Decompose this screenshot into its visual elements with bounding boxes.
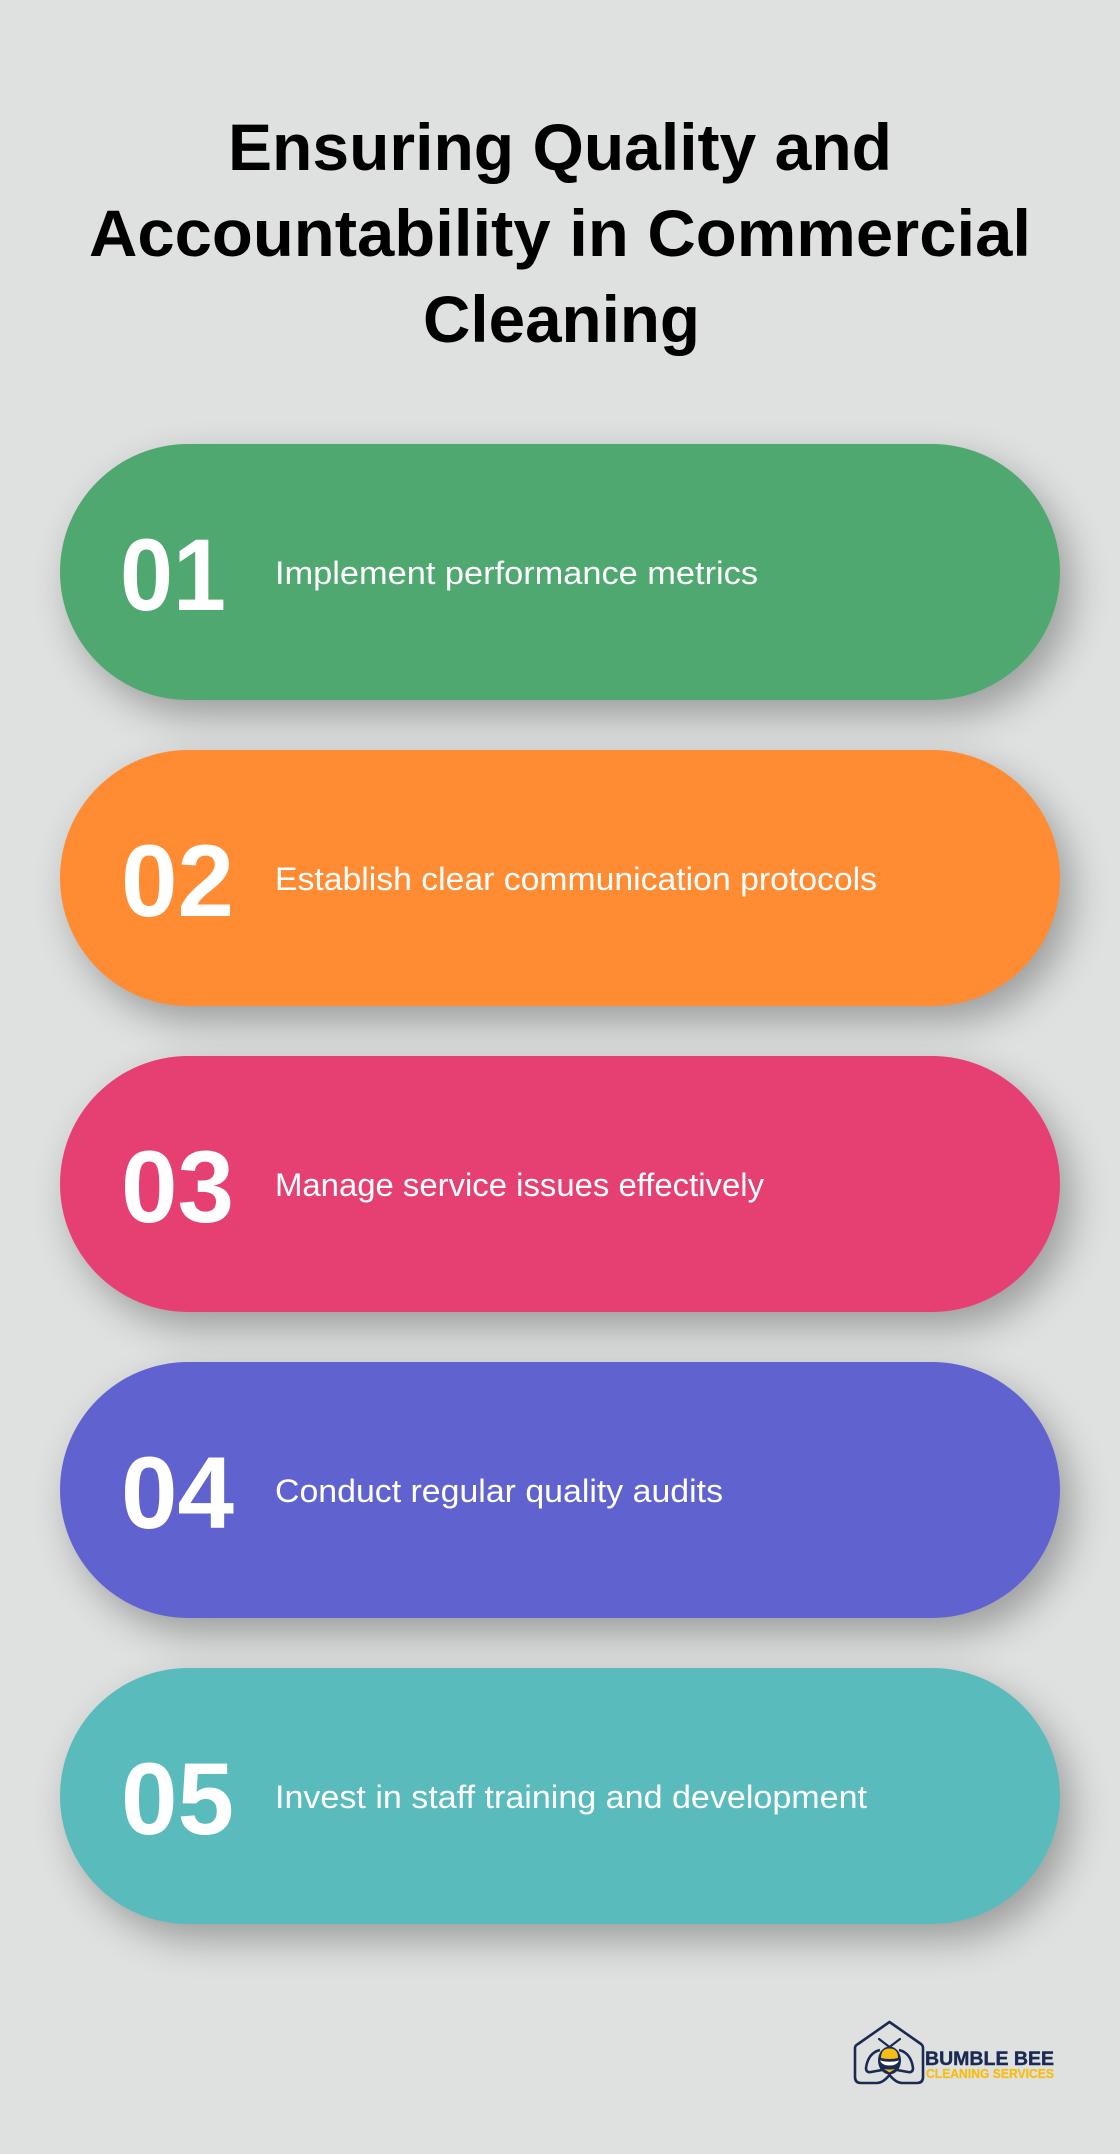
wordmark: CLEANING SERVICES [926, 2067, 1054, 2081]
panel: step 1 pill [60, 444, 1060, 700]
title [89, 110, 1031, 356]
title: Accountability in Commercial [89, 196, 1031, 270]
step 4 text: Conduct regular quality audits [275, 1473, 723, 1509]
step 5 text: Invest in staff training and development [275, 1779, 867, 1815]
panel: step 2 pill [60, 750, 1060, 1006]
step 2 text: Establish clear communication protocols [275, 861, 877, 897]
panel: step 5 pill [60, 1668, 1060, 1924]
step 1 text: Implement performance metrics [275, 555, 758, 591]
logo: Bumble Bee Cleaning Services [855, 2022, 1054, 2083]
panel: step 4 pill [60, 1362, 1060, 1618]
title: Ensuring Quality and [228, 110, 892, 184]
step 3 text [121, 1130, 764, 1244]
icon: house with bee [855, 2022, 923, 2083]
step 2 text: 02 [121, 824, 234, 938]
step 5 text: 05 [121, 1742, 234, 1856]
step 3 text: 03 [121, 1130, 234, 1244]
step 4 text [121, 1436, 723, 1550]
step 4 text: 04 [121, 1436, 234, 1550]
step 1 text [120, 518, 758, 632]
panel: step 3 pill [60, 1056, 1060, 1312]
step 5 text [121, 1742, 867, 1856]
wordmark: BUMBLE BEE [925, 2049, 1054, 2070]
step 1 text: 01 [120, 518, 226, 632]
step 3 text: Manage service issues effectively [275, 1167, 764, 1203]
step 2 text [121, 824, 877, 938]
title: Cleaning [423, 282, 700, 356]
wordmark [925, 2049, 1054, 2081]
